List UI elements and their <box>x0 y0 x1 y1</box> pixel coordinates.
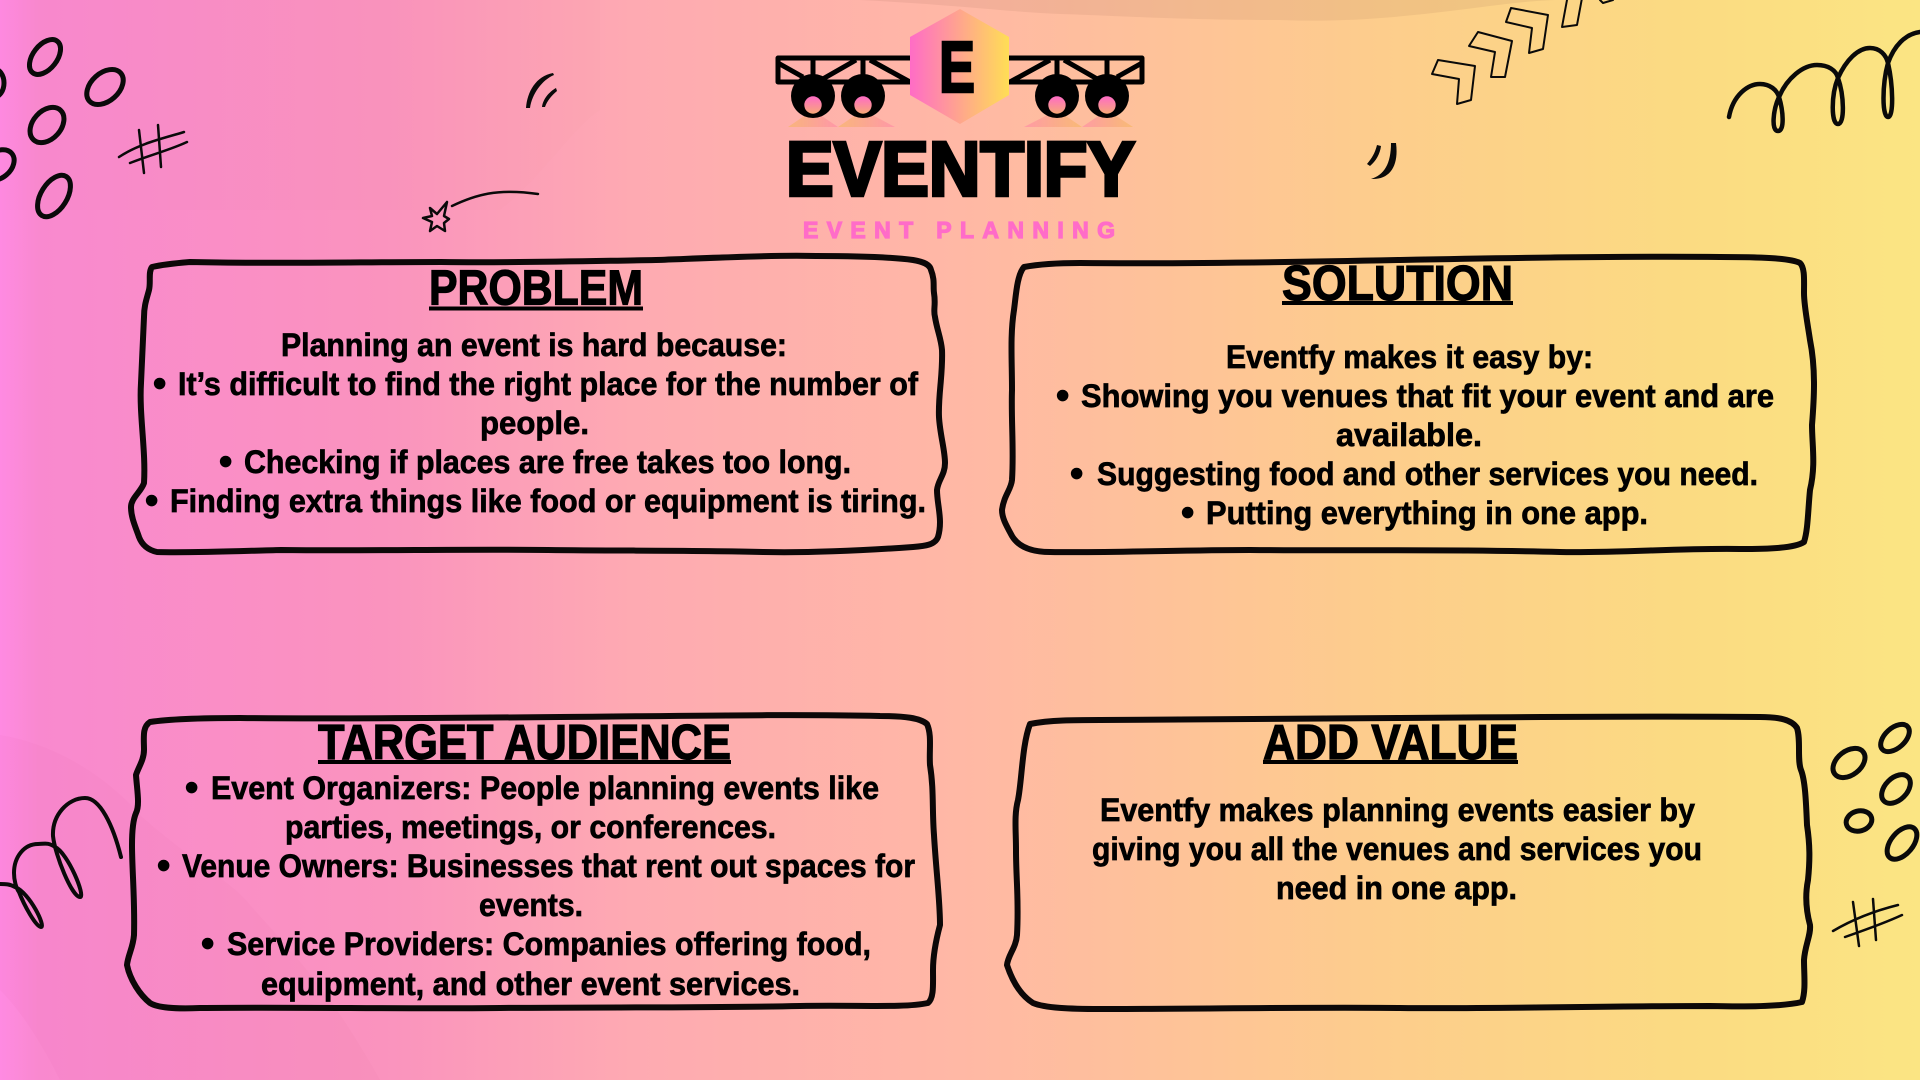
panel: solution <box>1002 257 1814 552</box>
heading underline: solution <box>1282 301 1513 305</box>
wheels <box>791 74 1129 118</box>
text: add value body <box>1092 792 1702 906</box>
text: problem body: • <box>153 363 166 405</box>
card outline: add value <box>1007 717 1810 1009</box>
heading underline: target audience <box>318 760 731 764</box>
text: target audience body: • <box>185 767 198 809</box>
text: problem body: It’s difficult to find the right place for the number of <box>178 366 918 402</box>
doodle: hash bottom right <box>1833 899 1902 946</box>
text: target audience body: Event Organizers: People planning events like <box>211 770 879 806</box>
left truss frame <box>778 58 912 82</box>
text: solution body: • <box>1056 375 1069 417</box>
text: target audience body: events. <box>479 887 583 923</box>
text: problem body: • <box>219 441 232 483</box>
text: target audience body: Service Providers: Companies offering food, <box>227 926 871 962</box>
doodle: spring bottom left <box>0 798 121 927</box>
text: target audience body: • <box>157 845 170 887</box>
heading: solution: SOLUTION <box>1282 257 1513 311</box>
text: problem body: Checking if places are free takes too long. <box>244 444 851 480</box>
doodle: arcs top right-center <box>1367 143 1397 179</box>
text: solution body: Suggesting food and other services you need. <box>1097 456 1758 492</box>
text: solution body: available. <box>1336 417 1482 453</box>
text: solution body: Putting everything in one app. <box>1206 495 1648 531</box>
doodle: ovals bottom right <box>1827 719 1920 865</box>
text: solution body: • <box>1070 453 1083 495</box>
doodle: shooting star <box>423 192 538 231</box>
logo: truck icon with hexagon <box>778 9 1142 127</box>
left wheel glow <box>788 110 895 127</box>
heading underline: problem <box>429 306 643 310</box>
text: problem body: Finding extra things like food or equipment is tiring. <box>170 483 926 519</box>
text: add value body: giving you all the venues and services you <box>1092 831 1702 867</box>
text: problem body: people. <box>480 405 589 441</box>
text: problem body: Planning an event is hard because: <box>281 327 787 363</box>
right wheel glow <box>1024 110 1133 127</box>
text: solution body: • <box>1181 492 1194 534</box>
text: solution body: Showing you venues that fit your event and are <box>1081 378 1774 414</box>
card outline: problem <box>131 256 945 552</box>
card outline: solution <box>1002 257 1814 552</box>
text: add value body: need in one app. <box>1276 870 1517 906</box>
doodle: hash top left <box>119 125 187 173</box>
heading underline: add value <box>1263 760 1518 764</box>
card outline: target audience <box>127 715 940 1008</box>
doodle: chevrons top right <box>1432 0 1613 104</box>
text: target audience body <box>157 767 915 1002</box>
text: target audience body: • <box>201 923 214 965</box>
hexagon badge <box>910 9 1009 124</box>
title: EVENTIFY <box>786 126 1135 212</box>
doodle: ovals top left <box>0 34 130 222</box>
badge letter: E <box>939 28 975 108</box>
heading: target audience: TARGET AUDIENCE <box>318 716 731 770</box>
heading: add value: ADD VALUE <box>1263 716 1518 770</box>
text: solution body: Eventfy makes it easy by: <box>1226 339 1593 375</box>
text: solution body <box>1056 339 1774 534</box>
doodle: arcs top center-left <box>526 73 557 108</box>
text: problem body: • <box>145 480 158 522</box>
subtitle: EVENT PLANNING <box>803 217 1115 243</box>
panel: target audience <box>127 715 940 1008</box>
panel: add value <box>1007 716 1810 1009</box>
text: target audience body: parties, meetings, or conferences. <box>285 809 776 845</box>
doodle: spring top right <box>1729 32 1920 131</box>
text: target audience body: Venue Owners: Businesses that rent out spaces for <box>182 848 915 884</box>
text: target audience body: equipment, and other event services. <box>261 966 800 1002</box>
right truss frame <box>1008 58 1142 82</box>
text: problem body <box>145 327 926 522</box>
text: add value body: Eventfy makes planning events easier by <box>1100 792 1695 828</box>
panel: problem <box>131 256 945 552</box>
heading: problem: PROBLEM <box>429 262 643 316</box>
